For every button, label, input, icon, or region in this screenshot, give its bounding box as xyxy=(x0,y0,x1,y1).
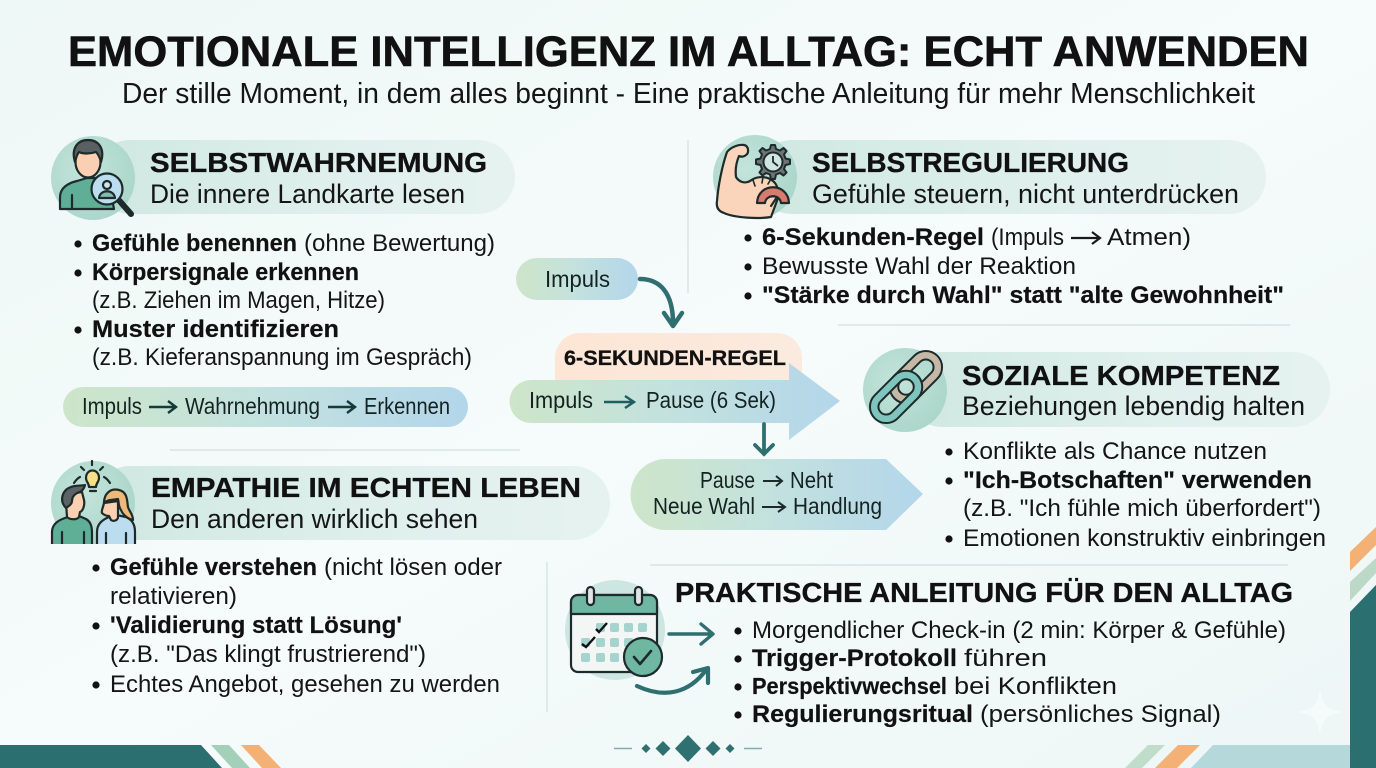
bullet list: Atmen) xyxy=(1107,224,1191,251)
icon: chain links xyxy=(863,348,947,432)
heading: SELBSTREGULIERUNG xyxy=(812,147,1129,178)
heading: EMPATHIE IM ECHTEN LEBEN xyxy=(151,472,581,503)
decoration: bottom left stripes xyxy=(0,745,281,768)
result arrow: Handlung xyxy=(793,493,882,519)
bullet list: (persönliches Signal) xyxy=(980,701,1221,728)
impulse pill xyxy=(516,258,638,300)
arrow: curved down xyxy=(640,279,682,326)
bullet list: Bewusste Wahl der Reaktion xyxy=(762,253,1076,280)
bullet list: bei Konflikten xyxy=(954,673,1117,700)
bullet list: Gefühle benennen xyxy=(92,230,297,257)
icon: two people with light bulb xyxy=(51,461,135,546)
bullet list: Emotionen konstruktiv einbringen xyxy=(963,525,1326,552)
bullet list: (Impuls xyxy=(991,224,1064,251)
panel: Selbstwahrnehmung xyxy=(51,136,515,427)
panel: Selbstregulierung xyxy=(713,135,1284,309)
arrow: down xyxy=(755,424,773,454)
icon: person with magnifier xyxy=(51,136,135,220)
bullet list: Regulierungsritual xyxy=(752,701,973,728)
bullet list: "Stärke durch Wahl" statt "alte Gewohnheit" xyxy=(762,282,1284,309)
result arrow: Pause xyxy=(700,467,755,493)
panel: Praktische Anleitung xyxy=(565,577,1293,728)
bullet list: (z.B. Kieferanspannung im Gespräch) xyxy=(92,344,472,371)
bullet list: Konflikte als Chance nutzen xyxy=(963,438,1267,465)
bullet list: (ohne Bewertung) xyxy=(304,230,495,257)
panel: central flow 6-Sekunden-Regel xyxy=(510,258,923,530)
rule heading tab: 6-SEKUNDEN-REGEL xyxy=(564,346,786,370)
bullet list: (nicht lösen oder xyxy=(324,554,502,581)
bullet list: Trigger-Protokoll xyxy=(752,645,957,672)
bullet list: (z.B. Ziehen im Magen, Hitze) xyxy=(92,287,385,314)
bullet list: Morgendlicher Check-in (2 min: Körper & Gefühle) xyxy=(752,617,1286,644)
bullet list: (z.B. "Das klingt frustrierend") xyxy=(110,641,426,668)
icon: flexed arm with gear and gauge xyxy=(713,135,797,219)
header pill xyxy=(905,352,1330,427)
bullet list: Körpersignale erkennen xyxy=(92,259,359,286)
bullet list xyxy=(945,438,1326,552)
bullet list: 6-Sekunden-Regel xyxy=(762,224,984,251)
heading: SELBSTWAHRNEMUNG xyxy=(150,147,487,178)
subheading: Beziehungen lebendig halten xyxy=(962,391,1305,421)
bullet list: 'Validierung statt Lösung' xyxy=(110,612,402,639)
heading: SOZIALE KOMPETENZ xyxy=(962,360,1280,391)
header pill xyxy=(93,140,515,214)
bullet list: (z.B. "Ich fühle mich überfordert") xyxy=(963,495,1321,522)
decoration: bottom right corner xyxy=(1125,527,1376,768)
rule heading tab xyxy=(555,333,802,382)
bullet list: Perspektivwechsel xyxy=(752,673,947,699)
big arrow: Pause (6 Sek) xyxy=(646,387,776,413)
header pill xyxy=(755,140,1266,214)
bullet list: relativieren) xyxy=(110,583,237,610)
icon: calendar with check and arrows xyxy=(565,580,713,693)
decoration: bottom centre diamonds xyxy=(614,735,762,762)
subtitle: Der stille Moment, in dem alles beginnt - Eine praktische Anleitung für mehr Menschlichkeit xyxy=(122,78,1255,110)
divider lines xyxy=(170,140,1290,712)
flow pill: Erkennen xyxy=(364,393,450,419)
bullet list: Echtes Angebot, gesehen zu werden xyxy=(110,671,500,698)
flow pill: Impuls xyxy=(82,393,142,419)
flow pill xyxy=(63,387,468,427)
bullet list: Muster identifizieren xyxy=(92,316,339,343)
heading: PRAKTISCHE ANLEITUNG FÜR DEN ALLTAG xyxy=(675,577,1293,608)
bullet list: führen xyxy=(964,645,1047,672)
header pill xyxy=(93,466,610,540)
bullet list xyxy=(92,554,502,698)
result arrow xyxy=(630,459,923,530)
result arrow: Neht xyxy=(790,467,834,493)
big arrow: Impuls xyxy=(529,387,593,413)
subheading: Gefühle steuern, nicht unterdrücken xyxy=(812,179,1239,209)
subheading: Den anderen wirklich sehen xyxy=(151,504,478,534)
subheading: Die innere Landkarte lesen xyxy=(150,179,465,209)
bullet list xyxy=(74,230,495,371)
bullet list: Gefühle verstehen xyxy=(110,554,317,581)
panel: Empathie xyxy=(51,461,610,698)
big arrow xyxy=(510,363,840,440)
bullet list xyxy=(744,224,1284,309)
bullet list: "Ich-Botschaften" verwenden xyxy=(963,467,1312,494)
impulse pill: Impuls xyxy=(545,266,610,292)
panel: Soziale Kompetenz xyxy=(863,348,1330,552)
title: EMOTIONALE INTELLIGENZ IM ALLTAG: ECHT ANWENDEN xyxy=(68,28,1309,76)
flow pill: Wahrnehmung xyxy=(185,393,320,419)
bullet list xyxy=(734,617,1286,728)
result arrow: Neue Wahl xyxy=(653,493,755,519)
